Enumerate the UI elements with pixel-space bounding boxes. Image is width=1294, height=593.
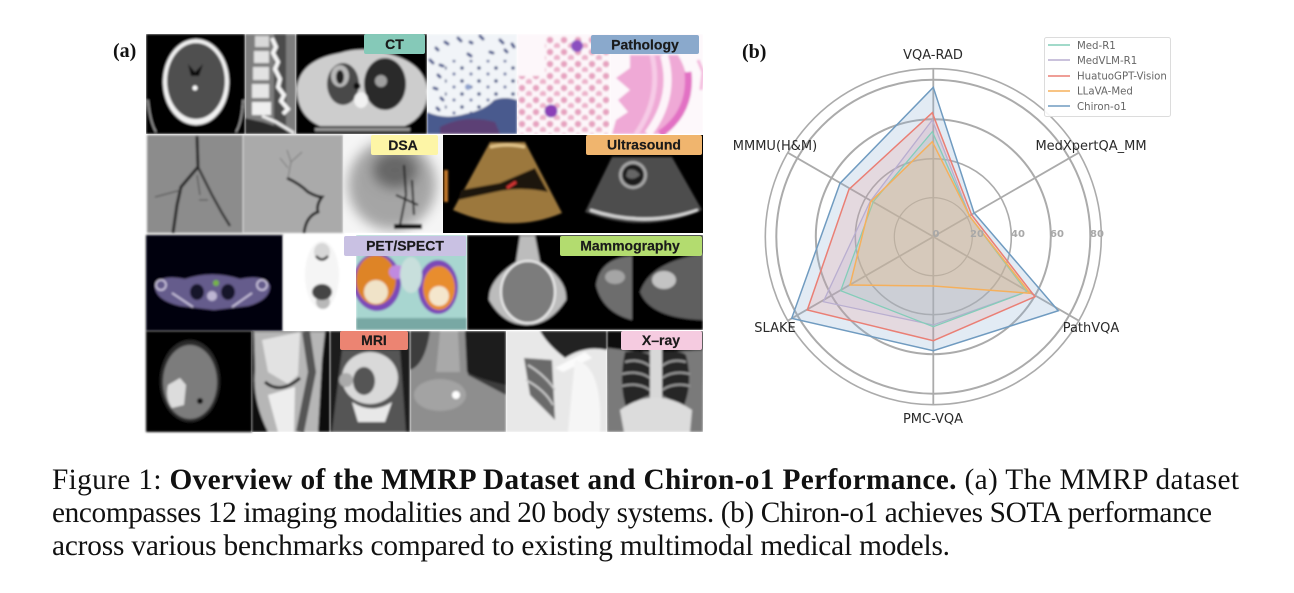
axis labels: MMMU(H&M) (733, 139, 817, 154)
figure caption: encompasses 12 imaging modalities and 20 body systems. (b) Chiron-o1 achieves SOTA performance (52, 497, 1212, 529)
radial tick labels (933, 229, 1104, 240)
label: CT (364, 34, 425, 54)
label: PET/SPECT (344, 236, 466, 256)
image: chest CT (296, 34, 427, 134)
axis labels: SLAKE (754, 321, 796, 336)
image: chest X-ray (607, 331, 703, 432)
series: Med-R1 (841, 132, 1027, 327)
image: pelvic MRI (330, 331, 410, 432)
panel b: radar chart (733, 38, 1170, 427)
image: foot X-ray (410, 331, 506, 432)
image: shoulder X-ray (506, 331, 607, 432)
radial tick labels: 40 (1011, 229, 1025, 240)
radial tick labels: 60 (1050, 229, 1064, 240)
label: DSA: DSA (388, 137, 418, 153)
image: doppler ultrasound (444, 142, 562, 223)
axis labels: PMC-VQA (903, 412, 963, 427)
image: tissue section (611, 54, 703, 134)
figure caption (52, 464, 1239, 562)
series: Chiron-o1 (792, 87, 1058, 351)
legend: MedVLM-R1 (1077, 56, 1137, 67)
axis labels (733, 48, 1147, 427)
label: Mammography: Mammography (580, 238, 680, 254)
label: DSA (371, 135, 438, 155)
figure caption: Figure 1: Overview of the MMRP Dataset and Chiron-o1 Performance. (a) The MMRP dataset (52, 464, 1239, 496)
image: brain CT (146, 34, 245, 134)
axis labels: PathVQA (1063, 321, 1119, 336)
label: Ultrasound (586, 135, 702, 155)
panel label: (a): (a) (113, 40, 136, 62)
image: PET-CT axial (146, 235, 283, 331)
image: knee MRI (252, 331, 330, 432)
image: ultrasound background (443, 135, 703, 233)
label: X-ray (621, 331, 702, 350)
legend: Chiron-o1 (1077, 102, 1127, 113)
legend (1044, 38, 1170, 116)
image: skull angiogram (343, 135, 443, 233)
label: CT: CT (385, 36, 404, 52)
panel label: (b): (b) (742, 41, 766, 63)
label: MRI: MRI (361, 332, 387, 348)
label: Pathology: Pathology (611, 36, 679, 52)
radial tick labels: 20 (970, 229, 984, 240)
legend: Med-R1 (1077, 41, 1116, 52)
series: HuatuoGPT-Vision (807, 113, 1035, 341)
image: spine CT (245, 34, 296, 134)
image: angiogram 1 (147, 135, 243, 233)
series: MedVLM-R1 (823, 120, 1027, 325)
image: brain MRI (146, 331, 252, 432)
label: Ultrasound: Ultrasound (607, 136, 681, 152)
label: Mammography (560, 236, 702, 256)
image: SPECT lungs (353, 235, 467, 330)
panel a: imaging modality collage (146, 34, 703, 432)
image: blood smear (517, 34, 610, 134)
figure caption: across various benchmarks compared to existing multimodal medical models. (52, 530, 950, 562)
image: whole-body PET (283, 235, 356, 331)
axis labels: VQA-RAD (903, 48, 963, 63)
image: angiogram 2 (243, 135, 343, 233)
label: Pathology (591, 35, 699, 54)
series: LLaVA-Med (850, 142, 1030, 293)
label: MRI (340, 331, 408, 350)
radial tick labels: 0 (933, 229, 940, 240)
legend: LLaVA-Med (1077, 86, 1133, 98)
label: PET/SPECT: PET/SPECT (366, 238, 444, 254)
radial tick labels: 80 (1090, 229, 1104, 240)
legend: HuatuoGPT-Vision (1077, 72, 1167, 82)
image: cytology slide (427, 34, 517, 134)
image: mammography (467, 235, 703, 330)
label: X-ray: X–ray (642, 332, 680, 348)
radar grid (765, 69, 1101, 405)
axis labels: MedXpertQA_MM (1035, 139, 1147, 154)
image: fetal ultrasound (585, 157, 702, 223)
